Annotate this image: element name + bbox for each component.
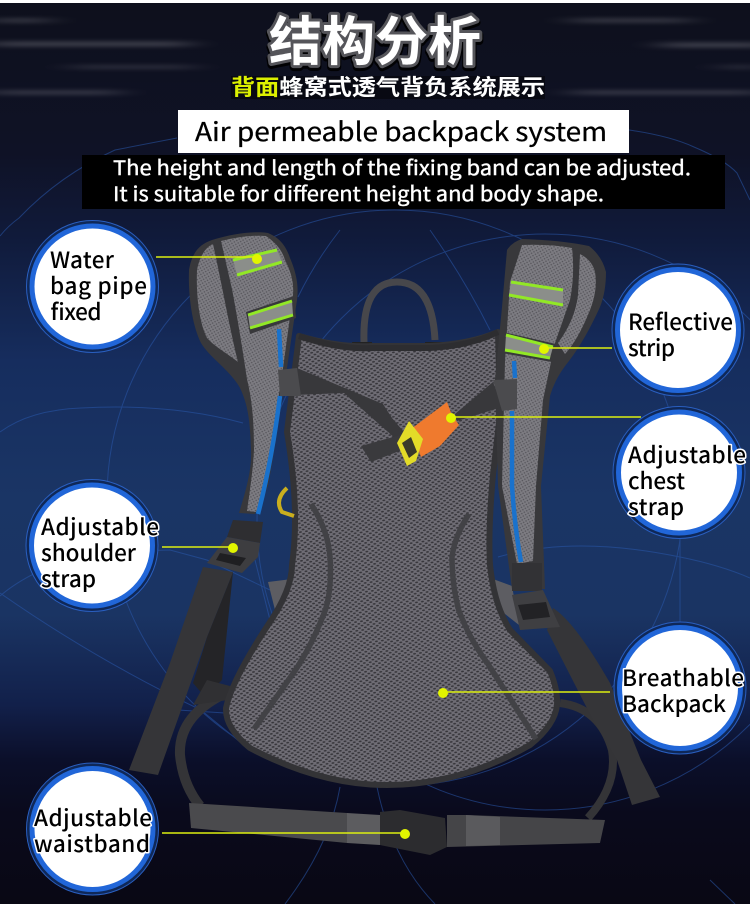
title: 结构分析 (269, 13, 481, 72)
callout: Adjustable shoulder strap: shoulder (41, 536, 137, 568)
callout: Water bag pipe fixed (26, 220, 158, 352)
callout lines and dots (156, 254, 641, 839)
side pockets (268, 579, 519, 625)
callout: Breathable Backpack: Backpack (622, 687, 726, 719)
water tube (258, 329, 521, 562)
callout: Adjustable shoulder strap: strap (41, 562, 96, 594)
handle (352, 282, 445, 352)
callout: Adjustable chest strap: strap (628, 490, 684, 522)
waist belt (189, 803, 605, 855)
callout: Reflective strip: Reflective (628, 305, 733, 337)
callout: Adjustable waistband (26, 763, 158, 895)
shoulder strap buckles (207, 520, 560, 630)
callout: Adjustable chest strap: Adjustable (628, 438, 746, 470)
subtitle: 背面蜂窝式透气背负系统展示 (231, 74, 545, 100)
callout: Water bag pipe fixed: Water (50, 243, 115, 275)
chest strap (278, 368, 517, 462)
callout: Reflective strip (612, 264, 744, 396)
callout: Adjustable chest strap (613, 406, 746, 538)
callout: Adjustable chest strap: chest (628, 464, 685, 496)
callout: Reflective strip: strip (628, 331, 675, 363)
panel seams (254, 504, 536, 739)
yellow hook (279, 488, 294, 516)
callout: Water bag pipe fixed: bag pipe (50, 269, 147, 301)
reflective strips (233, 250, 563, 362)
callout: Water bag pipe fixed: fixed (51, 295, 102, 327)
callout: Adjustable waistband: Adjustable (34, 801, 152, 833)
backpack illustration (129, 232, 660, 855)
callout: Breathable Backpack: Breathable (622, 661, 744, 693)
callout: Breathable Backpack (614, 622, 746, 754)
description box: It is suitable for different height and body shape. (113, 178, 604, 207)
title: 结构分析 (269, 15, 481, 74)
chest buckle (397, 402, 459, 466)
callout: Adjustable shoulder strap: Adjustable (41, 510, 159, 542)
lower shoulder straps and hip loops (129, 567, 660, 818)
top band of panel (299, 332, 498, 348)
left shoulder pad (189, 232, 298, 514)
callout: Adjustable waistband: waistband (34, 827, 150, 859)
description box (82, 152, 725, 209)
callout: Adjustable shoulder strap (26, 480, 159, 612)
right shoulder pad (495, 239, 606, 591)
heading box: Air permeable backpack system: Air permeable backpack system (195, 112, 607, 149)
description box: The height and length of the fixing band can be adjusted. (113, 152, 691, 181)
back panel mesh (226, 332, 557, 785)
